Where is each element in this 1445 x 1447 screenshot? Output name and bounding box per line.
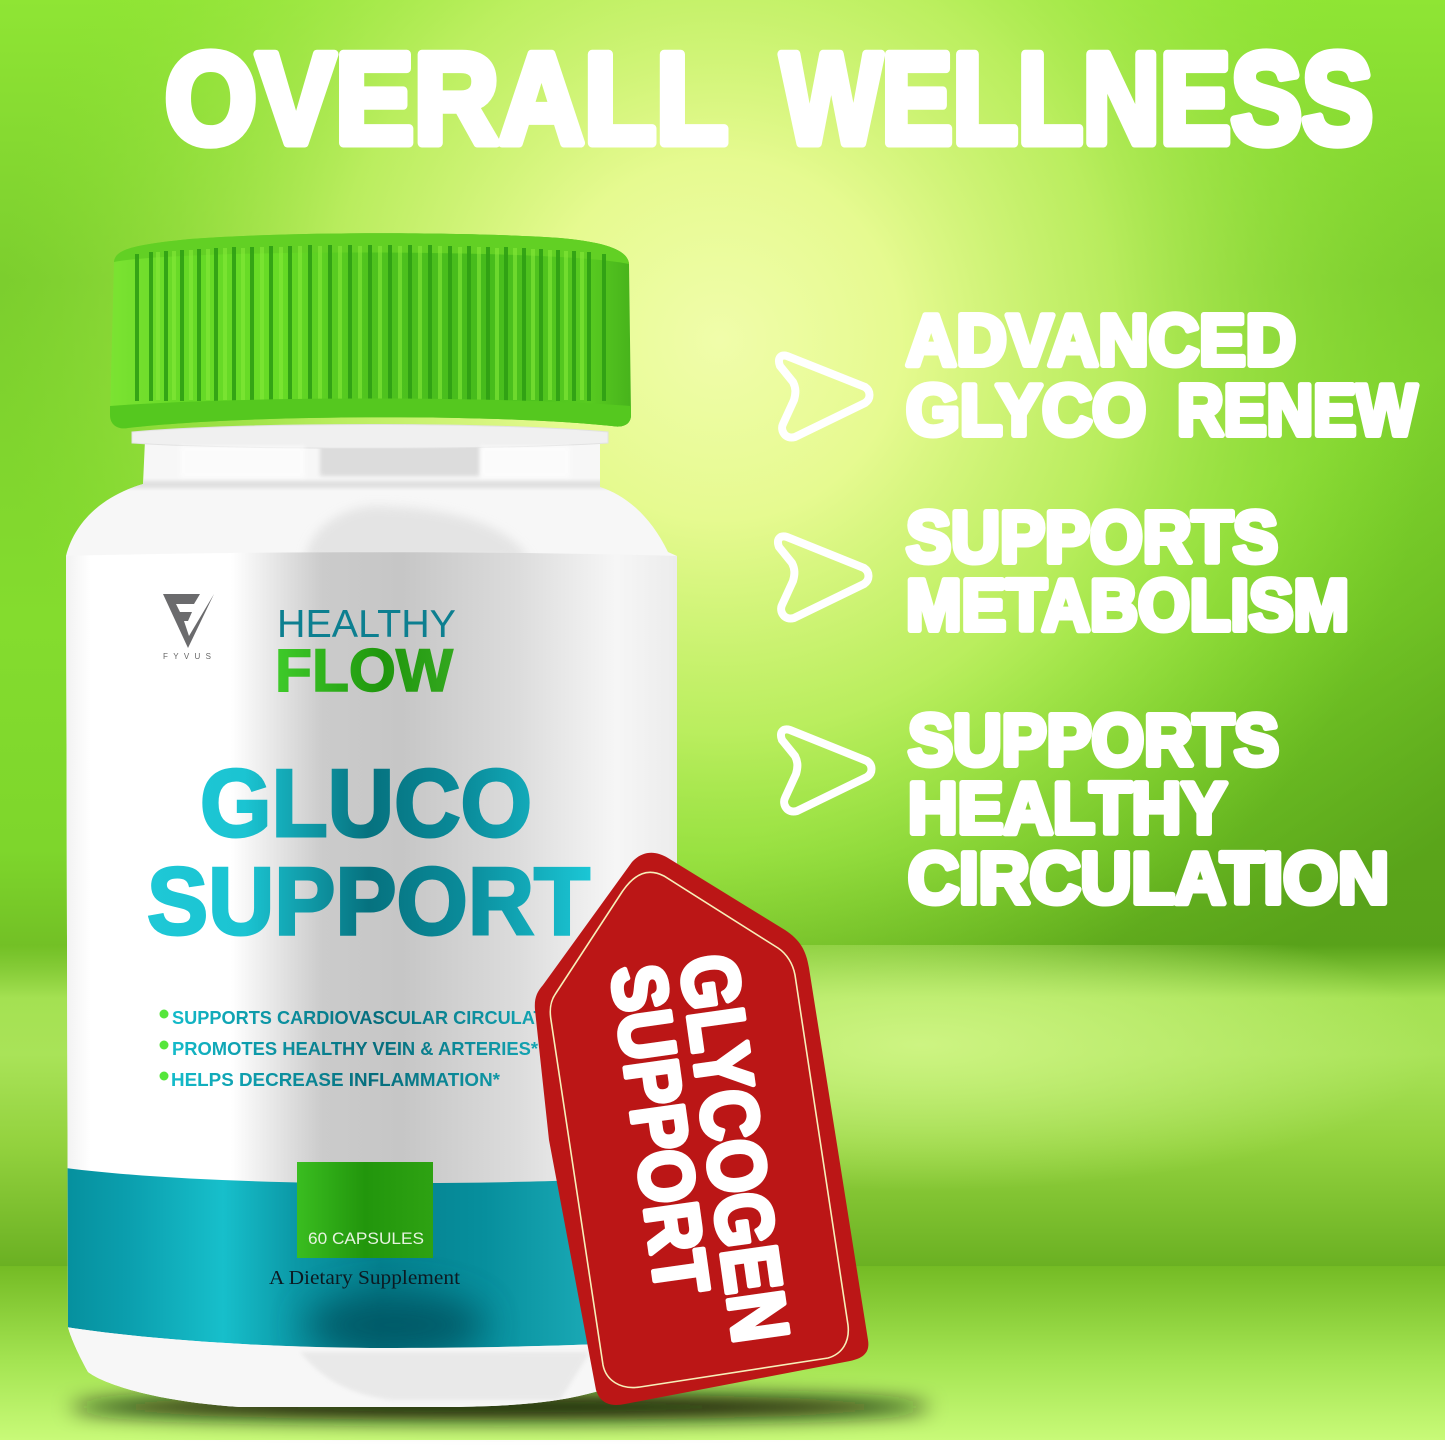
arrow icon 2: [778, 536, 868, 619]
tag text support: SUPPORT: [594, 960, 724, 1299]
benefit 1 text: [906, 301, 1417, 451]
capsule count box: 60 CAPSULES: [308, 1229, 424, 1248]
benefit 2 text: [906, 498, 1349, 646]
tag stitching: [550, 872, 848, 1388]
label benefits list: HELPS DECREASE INFLAMMATION*: [171, 1070, 500, 1090]
title: OVERALL: [165, 27, 728, 171]
benefit 3 text: [908, 701, 1389, 919]
fyvus logo: [163, 594, 217, 661]
brand: healthy flow: HEALTHY: [277, 603, 456, 646]
label panel: [66, 552, 677, 1360]
tag text glycogen: GLYCOGEN: [663, 949, 806, 1348]
benefit 2: [778, 498, 1349, 646]
capsule count box: [297, 1162, 433, 1258]
red tag: glycogen support: [535, 853, 868, 1405]
product bottle: [60, 233, 680, 1410]
label benefits list: SUPPORTS CARDIOVASCULAR CIRCULATION*: [172, 1008, 584, 1028]
arrow icon 3: [781, 729, 872, 812]
bottle neck highlights: [180, 446, 570, 478]
benefit 1 text: RENEW: [1177, 371, 1417, 451]
benefit 2 text: METABOLISM: [906, 566, 1349, 646]
product name: SUPPORT: [147, 848, 590, 955]
teal label band: [68, 1168, 588, 1348]
brand: healthy flow: FLOW: [275, 637, 453, 704]
benefit 3 text: CIRCULATION: [908, 839, 1389, 919]
label benefits list: [160, 1008, 584, 1090]
benefit 3 text: HEALTHY: [908, 769, 1227, 849]
green ribbed cap: [110, 233, 631, 428]
fyvus logo: FYVUS: [163, 652, 217, 661]
arrow icon 1: [779, 355, 870, 438]
dietary supplement text: A Dietary Supplement: [269, 1267, 460, 1289]
brand: healthy flow: [275, 603, 456, 704]
benefit 1: [779, 301, 1417, 451]
benefit 3 text: SUPPORTS: [908, 701, 1279, 781]
benefit 3: [781, 701, 1389, 919]
benefit 2 text: SUPPORTS: [906, 498, 1278, 578]
bottle body: [66, 440, 677, 1407]
tag shape: [535, 853, 868, 1405]
benefit 1 text: ADVANCED: [906, 301, 1296, 381]
bottle neck ring: [132, 424, 608, 448]
label benefits list: PROMOTES HEALTHY VEIN & ARTERIES*: [172, 1039, 538, 1059]
title: [165, 27, 1373, 171]
bottle ground shadow: [70, 1394, 930, 1420]
product name: [147, 750, 590, 955]
benefit 1 text: GLYCO: [906, 371, 1146, 451]
product name: GLUCO: [200, 750, 532, 857]
